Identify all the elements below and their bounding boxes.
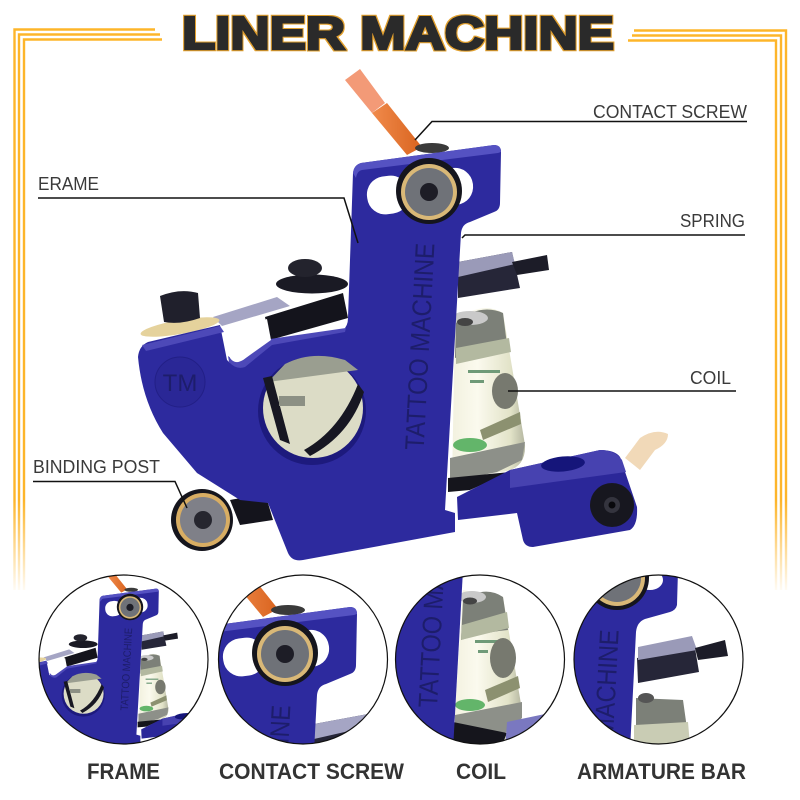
- detail circle: frame: [38, 574, 209, 745]
- callout: frame: [38, 174, 358, 243]
- callout: coil: COIL: [690, 368, 731, 388]
- detail circle: armature bar: MACHINE: [589, 629, 625, 738]
- detail circle: contact screw: [218, 574, 388, 745]
- engraved model text: TATTOO MACHINE: [400, 242, 440, 451]
- detail circle: frame: TATTOO MACHINE: [119, 628, 135, 711]
- TM badge: TM: [163, 370, 197, 397]
- callout: contact screw: [415, 102, 747, 140]
- caption: coil: COIL: [456, 759, 506, 784]
- callout: binding post: BINDING POST: [33, 457, 160, 477]
- detail circle: coil: TATTOO MACHINE: [413, 500, 454, 708]
- callout: contact screw: CONTACT SCREW: [593, 102, 747, 122]
- gold frame: left: [14, 30, 162, 590]
- TM badge: [155, 357, 205, 407]
- detail circle: coil: [394, 574, 566, 745]
- main tattoo machine: [138, 69, 668, 560]
- callout: frame: ERAME: [38, 174, 99, 194]
- callout: spring: SPRING: [680, 211, 745, 231]
- frame fade to white: [0, 500, 800, 595]
- title: LINER MACHINE: [182, 7, 614, 59]
- caption: contact screw: CONTACT SCREW: [219, 759, 404, 784]
- detail circle: contact screw: CHINE: [263, 704, 296, 778]
- caption: armature bar: ARMATURE BAR: [577, 759, 746, 784]
- callout: binding post: [33, 457, 187, 508]
- caption: frame: FRAME: [87, 759, 160, 784]
- detail circle: armature bar: [573, 574, 744, 745]
- callout: spring: [462, 211, 745, 238]
- gold frame: right: [628, 30, 786, 590]
